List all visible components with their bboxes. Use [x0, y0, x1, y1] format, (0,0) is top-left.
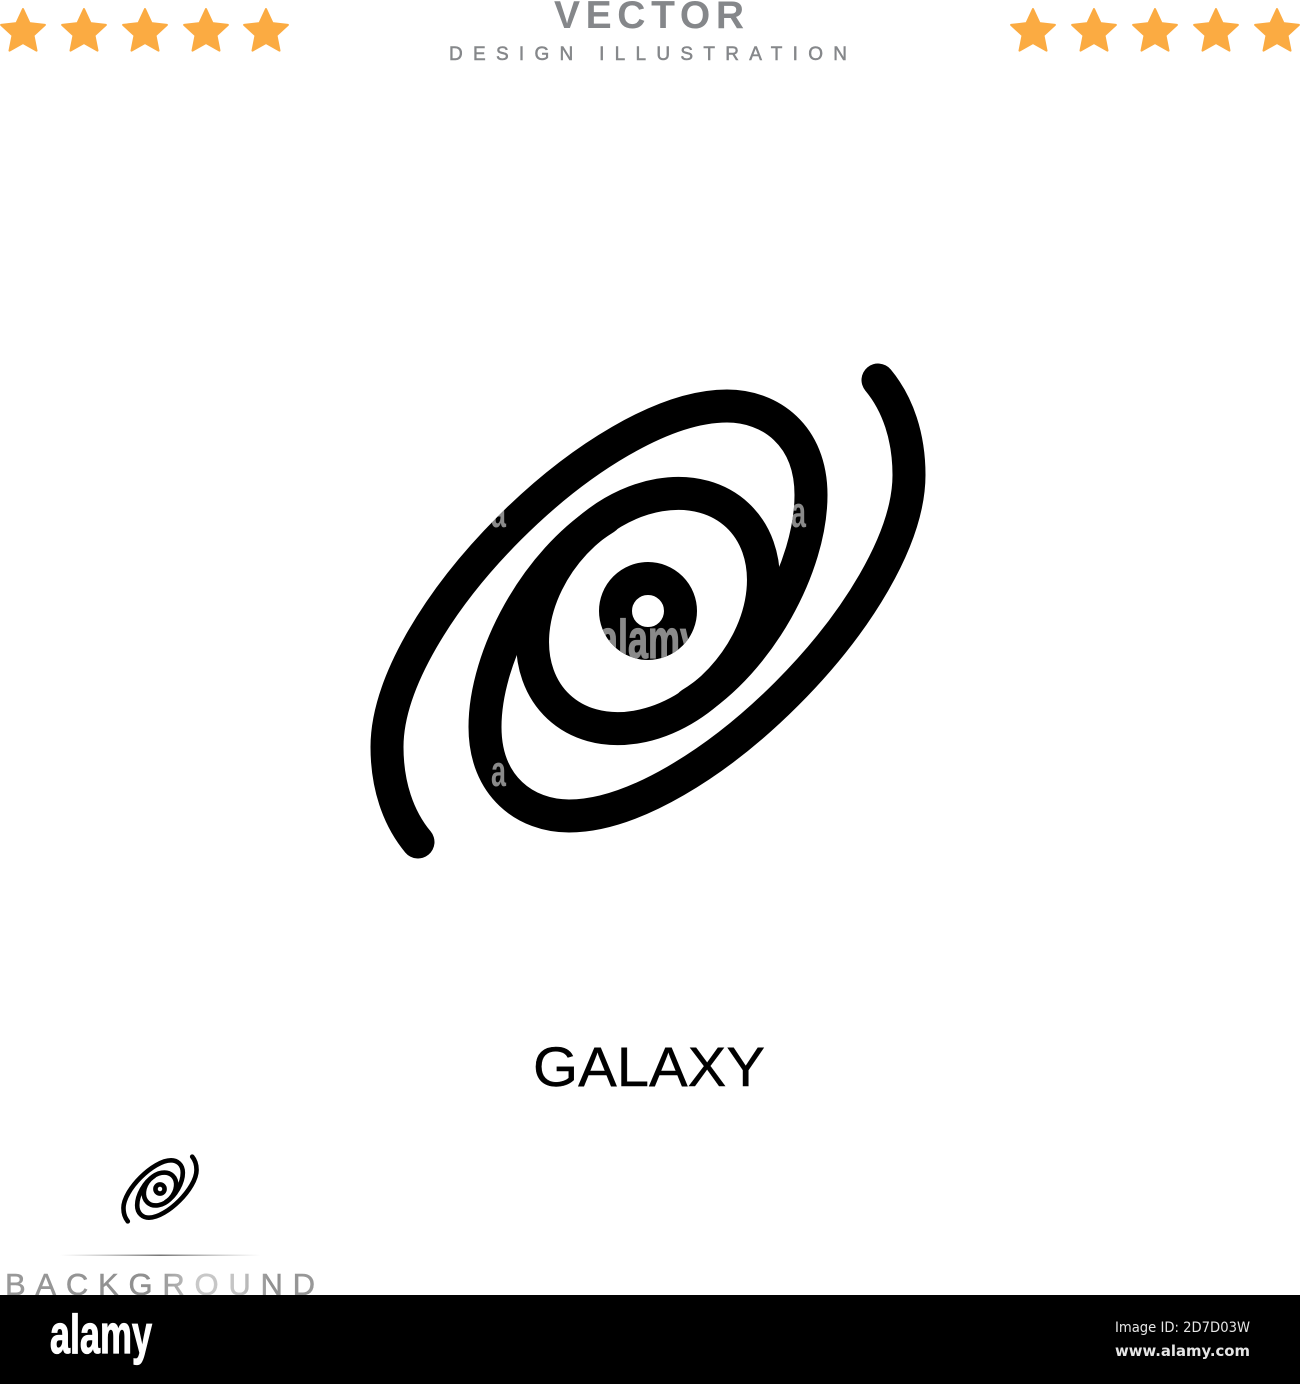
- watermark: alamy fragments over icon: [491, 488, 806, 796]
- rating stars: left: [1, 9, 288, 51]
- subheading: DESIGN ILLUSTRATION: DESIGN ILLUSTRATION: [449, 44, 847, 65]
- footer website: www.alamy.com: [1115, 1342, 1250, 1360]
- icon: small galaxy preview: [123, 1157, 197, 1221]
- inner ring: [486, 447, 810, 775]
- spiral arm: left arm curving into inner ring: [387, 406, 811, 842]
- watermark: alamy fragments over icon: a: [491, 747, 506, 796]
- watermark: alamy fragments over icon: a: [491, 488, 506, 537]
- spiral arm: right arm curving into inner ring: [485, 380, 909, 816]
- icon: galaxy spiral: [387, 380, 909, 842]
- footer bar: [0, 1295, 1300, 1384]
- watermark: alamy fragments over icon: alamy: [598, 608, 700, 670]
- title: GALAXY: GALAXY: [533, 1035, 765, 1098]
- rating stars: right: [1011, 9, 1299, 51]
- watermark: alamy fragments over icon: a: [791, 488, 806, 537]
- footer logo: alamy: alamy: [50, 1303, 152, 1365]
- galaxy core ring: [616, 578, 680, 644]
- footer image id: Image ID: 2D7D03W: [1115, 1320, 1250, 1336]
- label: BACKGROUND: BACKGROUND: [5, 1267, 315, 1302]
